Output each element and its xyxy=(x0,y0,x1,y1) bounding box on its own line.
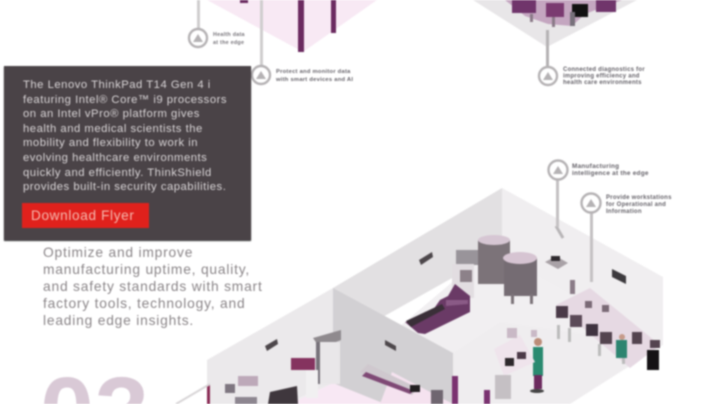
text block: section description: and safety standards with smart xyxy=(43,279,263,294)
white right floor xyxy=(453,322,660,404)
seated worker xyxy=(616,334,627,358)
inner partition wall xyxy=(333,288,453,404)
factory floor illustration xyxy=(176,188,663,404)
workstation row xyxy=(556,280,660,370)
callout: top left pin two: with smart devices and AI xyxy=(275,77,353,83)
text block: product description: evolving healthcare environments xyxy=(23,152,207,164)
callout: workstation pin: Provide workstations xyxy=(606,195,672,201)
text block: section description: leading edge insights. xyxy=(43,313,194,328)
text block: section description xyxy=(42,245,263,329)
factory floor xyxy=(207,240,663,404)
panel: product description xyxy=(4,66,251,240)
text block: product description: health and medical scientists the xyxy=(23,123,203,135)
callout: top right pin: improving efficiency and xyxy=(563,74,640,80)
long bench xyxy=(360,364,443,404)
callout: workstation pin: Information xyxy=(606,209,642,215)
wall vents xyxy=(265,252,433,351)
callout: top left pin one xyxy=(189,0,246,47)
callout: manufacturing pin xyxy=(548,160,649,227)
inspection camera xyxy=(545,226,568,269)
callout: top left pin one: at the edge xyxy=(213,40,244,46)
callout: workstation pin: for Operational and xyxy=(606,202,666,208)
purple columns xyxy=(176,376,490,404)
text block: section description: Optimize and improve xyxy=(43,245,193,260)
text block: product description: quickly and efficiently. ThinkShield xyxy=(23,167,212,179)
text block: product description xyxy=(22,79,227,194)
standing worker xyxy=(530,338,544,393)
callout: manufacturing pin: intelligence at the edge xyxy=(572,170,649,177)
text block: section description: manufacturing uptime, quality, xyxy=(43,262,250,277)
callout: top left pin one: Health data xyxy=(213,32,246,38)
callout: workstation pin xyxy=(582,194,672,282)
left machinery xyxy=(225,330,341,404)
callout: top right pin: Connected diagnostics for xyxy=(563,67,645,73)
text block: product description: featuring Intel® Core™ i9 processors xyxy=(23,94,227,106)
pink floor section xyxy=(290,383,385,404)
upper back wall xyxy=(333,188,502,345)
text block: product description: The Lenovo ThinkPad T14 Gen 4 i xyxy=(23,79,211,91)
top right room illustration xyxy=(473,0,637,47)
text block: product description: mobility and flexibility to work in xyxy=(23,137,198,149)
wall sign xyxy=(612,269,626,284)
inspection table xyxy=(494,328,537,399)
text block: product description: provides built-in security capabilities. xyxy=(23,181,226,193)
tanks xyxy=(456,235,537,304)
button: download flyer: Download Flyer xyxy=(31,208,135,223)
top left room illustration xyxy=(207,0,377,52)
left lower wall xyxy=(207,288,333,404)
callout: top left pin two xyxy=(252,0,353,84)
right back wall xyxy=(502,188,663,345)
callout: top right pin: health care environments xyxy=(563,80,642,86)
conveyor machine xyxy=(405,264,474,334)
callout: top left pin two: Protect and monitor data xyxy=(276,69,351,75)
callout: top right pin xyxy=(539,30,645,86)
callout: manufacturing pin: Manufacturing xyxy=(572,163,619,170)
text block: section description: factory tools, technology, and xyxy=(43,296,245,311)
text block: product description: on an Intel vPro® platform gives xyxy=(23,108,200,120)
button: download flyer xyxy=(22,203,149,228)
